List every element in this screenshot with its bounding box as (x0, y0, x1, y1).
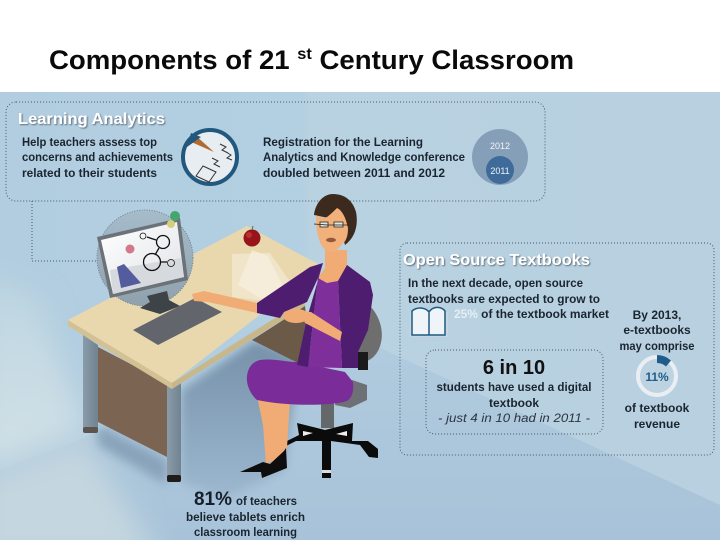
cardigan (297, 263, 373, 368)
hair back (314, 194, 357, 245)
heading: Learning Analytics (18, 111, 165, 128)
mouth (326, 238, 336, 242)
callout: 81% of teachers: believe tablets enrich (186, 510, 305, 524)
forearm (300, 311, 342, 341)
text: textbook revenue: revenue (634, 417, 680, 431)
panel: learning analytics (6, 102, 545, 261)
callout: 81% of teachers: 81% (194, 489, 232, 510)
text: e-textbooks (620, 308, 695, 353)
text: registration: Registration for the Learning (263, 135, 423, 149)
icon: apple (244, 226, 260, 246)
text: teachers: concerns and achievements (22, 150, 173, 164)
text: registration: Analytics and Knowledge conference (263, 150, 465, 164)
text: teachers (22, 135, 173, 180)
text: e-textbooks: may comprise (620, 339, 695, 353)
title: st (297, 46, 313, 63)
callout: 6 in 10: - just 4 in 10 had in 2011 - (438, 411, 590, 425)
panel: open source textbooks (400, 243, 714, 455)
text: registration: doubled between 2011 and 2012 (263, 166, 445, 180)
neck (318, 250, 347, 283)
text: e-textbooks: By 2013, (633, 308, 681, 322)
desk leg front (167, 382, 181, 482)
skirt (247, 359, 353, 405)
text: registration (263, 135, 465, 180)
illustration: desk (68, 226, 320, 482)
heading: Open Source Textbooks (403, 252, 590, 269)
illustration: monitor (97, 210, 193, 314)
desk leg left (83, 335, 98, 433)
text: e-textbooks: e-textbooks (623, 323, 691, 337)
shoes (240, 448, 287, 478)
title: Components of 21 (49, 45, 285, 75)
chart: 11% donut (638, 355, 676, 395)
chart: 2012 vs 2011 circles: 2011 (490, 166, 510, 176)
chart: screen diagram (117, 233, 174, 288)
legs (257, 396, 290, 464)
text: textbook revenue: of textbook (625, 401, 690, 415)
callout: 6 in 10: 6 in 10 (483, 357, 545, 379)
face (316, 208, 348, 252)
callout: 6 in 10 (426, 350, 603, 434)
text: teachers: related to their students (22, 166, 157, 180)
icon: pencil and checklist (183, 130, 237, 184)
icon: book (410, 307, 448, 337)
text: open source growth (408, 276, 609, 321)
callout: 81% of teachers: of teachers (236, 494, 297, 508)
callout: 6 in 10: students have used a digital (436, 380, 592, 394)
illustration: teacher (192, 194, 382, 478)
text: teachers: Help teachers assess top (22, 135, 157, 149)
text: open source growth: In the next decade, open source (408, 276, 583, 290)
hand (283, 309, 309, 323)
left arm (192, 291, 257, 313)
callout: 81% of teachers (186, 489, 305, 539)
title: Century Classroom (312, 45, 574, 75)
dress (308, 278, 342, 368)
callout: 81% of teachers: classroom learning (194, 525, 297, 539)
chart: 2012 vs 2011 circles (472, 129, 528, 185)
keyboard (133, 298, 222, 345)
glasses (314, 222, 349, 227)
text: textbook revenue (625, 401, 690, 431)
chart: 11% donut: 11% (645, 370, 669, 384)
callout: 6 in 10: textbook (489, 396, 539, 410)
chair (283, 304, 382, 478)
text: open source growth: 25% of the textbook market (454, 307, 609, 321)
chart: 2012 vs 2011 circles: 2012 (490, 141, 510, 151)
sleeve (257, 263, 323, 318)
text: open source growth: textbooks are expected to grow to (408, 292, 600, 306)
